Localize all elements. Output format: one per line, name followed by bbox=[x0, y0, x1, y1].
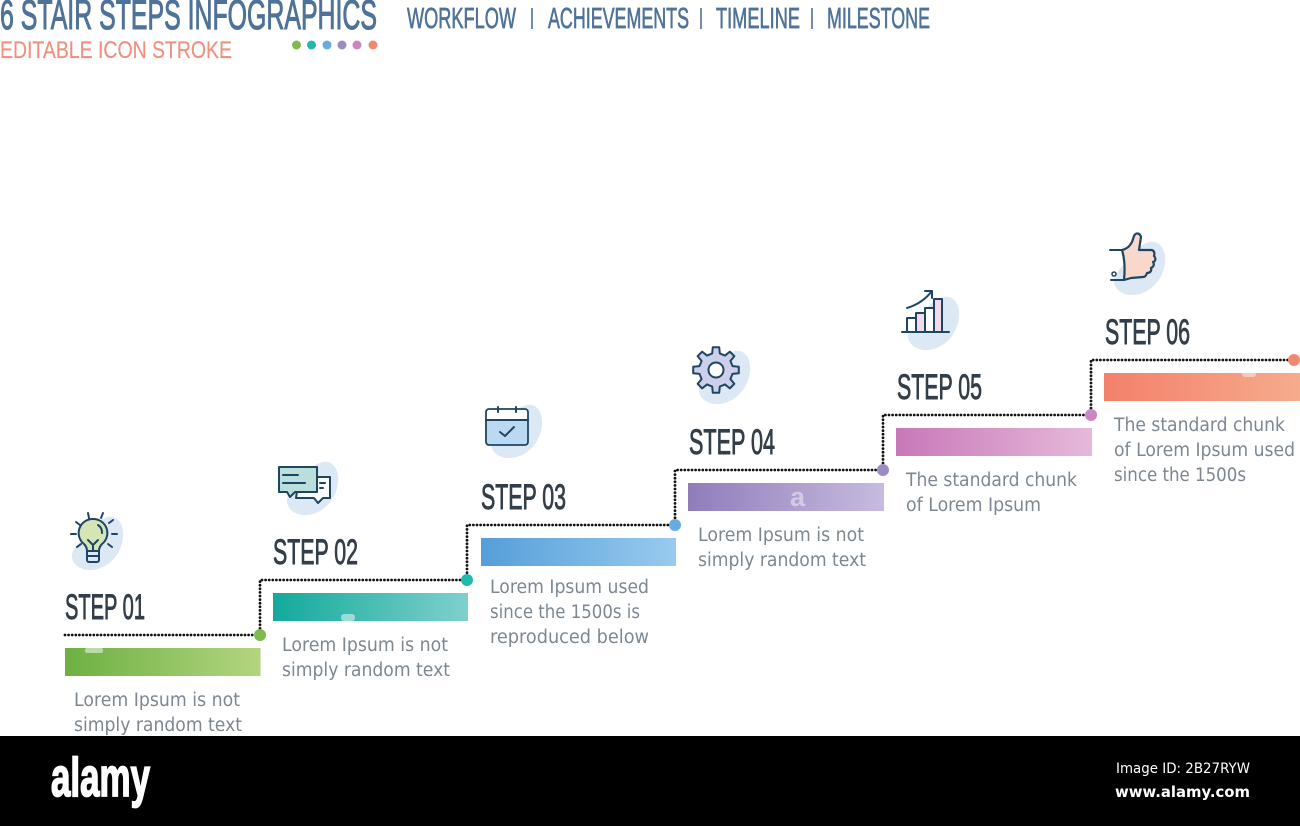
step 2 text: Lorem Ipsum is not bbox=[282, 635, 448, 656]
watermark footer band bbox=[0, 736, 1300, 826]
header keywords: MILESTONE bbox=[827, 3, 930, 35]
icon: thumbs up bbox=[1110, 233, 1165, 295]
step 2 bar bbox=[273, 593, 468, 621]
image id: Image ID: 2B27RYW bbox=[1116, 761, 1250, 777]
step 4 text: Lorem Ipsum is not bbox=[698, 525, 864, 546]
website: www.alamy.com bbox=[1115, 783, 1250, 801]
subtitle: EDITABLE ICON STROKE bbox=[0, 37, 232, 64]
icon: chat bubbles bbox=[279, 462, 338, 515]
step 6 watermark fragment bbox=[1242, 368, 1256, 377]
step 3 text: reproduced below bbox=[490, 627, 649, 648]
alamy logo: alamy bbox=[51, 746, 150, 808]
step 4 marker bbox=[877, 464, 889, 476]
step 6 heading: STEP 06 bbox=[1105, 313, 1190, 352]
step 3 text bbox=[490, 577, 649, 648]
step 4 watermark fragment: a bbox=[790, 482, 806, 512]
step 5 text: of Lorem Ipsum bbox=[906, 495, 1041, 516]
step 5 bbox=[896, 291, 1097, 516]
step 6 bar bbox=[1104, 373, 1300, 401]
step 2 text: simply random text bbox=[282, 660, 450, 681]
step 1 text: simply random text bbox=[74, 715, 242, 736]
step 5 heading: STEP 05 bbox=[897, 368, 982, 407]
step 5 text: The standard chunk bbox=[905, 470, 1077, 491]
step 1 watermark fragment bbox=[85, 648, 103, 653]
step 1 bar bbox=[65, 648, 260, 676]
header bbox=[0, 0, 930, 64]
step 4 text: simply random text bbox=[698, 550, 866, 571]
step 3 text: Lorem Ipsum used bbox=[490, 577, 649, 598]
step 3 text: since the 1500s is bbox=[490, 602, 640, 623]
step 1 heading: STEP 01 bbox=[65, 588, 145, 627]
stair connector line bbox=[65, 360, 1294, 635]
step 1 bbox=[65, 513, 266, 736]
step 1 text: Lorem Ipsum is not bbox=[74, 690, 240, 711]
step 2 marker bbox=[461, 574, 473, 586]
step 6 bbox=[1104, 233, 1300, 486]
header keywords: TIMELINE bbox=[716, 3, 800, 35]
header keywords bbox=[407, 3, 930, 35]
step 1 marker bbox=[254, 629, 266, 641]
icon: light bulb bbox=[71, 513, 123, 570]
step 6 marker bbox=[1288, 354, 1300, 366]
icon: calendar bbox=[486, 405, 542, 458]
header keywords: WORKFLOW bbox=[407, 3, 516, 35]
colour dots bbox=[292, 40, 378, 50]
step 2 heading: STEP 02 bbox=[273, 533, 358, 572]
step 2 bbox=[273, 462, 473, 681]
step 4 bbox=[688, 347, 889, 571]
step 5 bar bbox=[896, 428, 1092, 456]
header keywords: ACHIEVEMENTS bbox=[548, 3, 689, 35]
step 4 heading: STEP 04 bbox=[689, 423, 775, 462]
step 4 bar bbox=[688, 483, 884, 511]
step 5 marker bbox=[1085, 409, 1097, 421]
step 6 text bbox=[1113, 415, 1295, 486]
step 4 text bbox=[698, 525, 866, 571]
step 1 text bbox=[74, 690, 242, 736]
icon: gear bbox=[693, 347, 750, 404]
step 3 marker bbox=[669, 519, 681, 531]
step 5 text bbox=[905, 470, 1077, 516]
step 3 bar bbox=[481, 538, 676, 566]
step 3 bbox=[481, 405, 681, 648]
step 3 heading: STEP 03 bbox=[481, 478, 566, 517]
icon: growth chart bbox=[902, 291, 959, 350]
step 6 text: since the 1500s bbox=[1114, 465, 1246, 486]
step 6 text: The standard chunk bbox=[1113, 415, 1285, 436]
step 2 watermark fragment bbox=[341, 614, 355, 621]
step 2 text bbox=[282, 635, 450, 681]
